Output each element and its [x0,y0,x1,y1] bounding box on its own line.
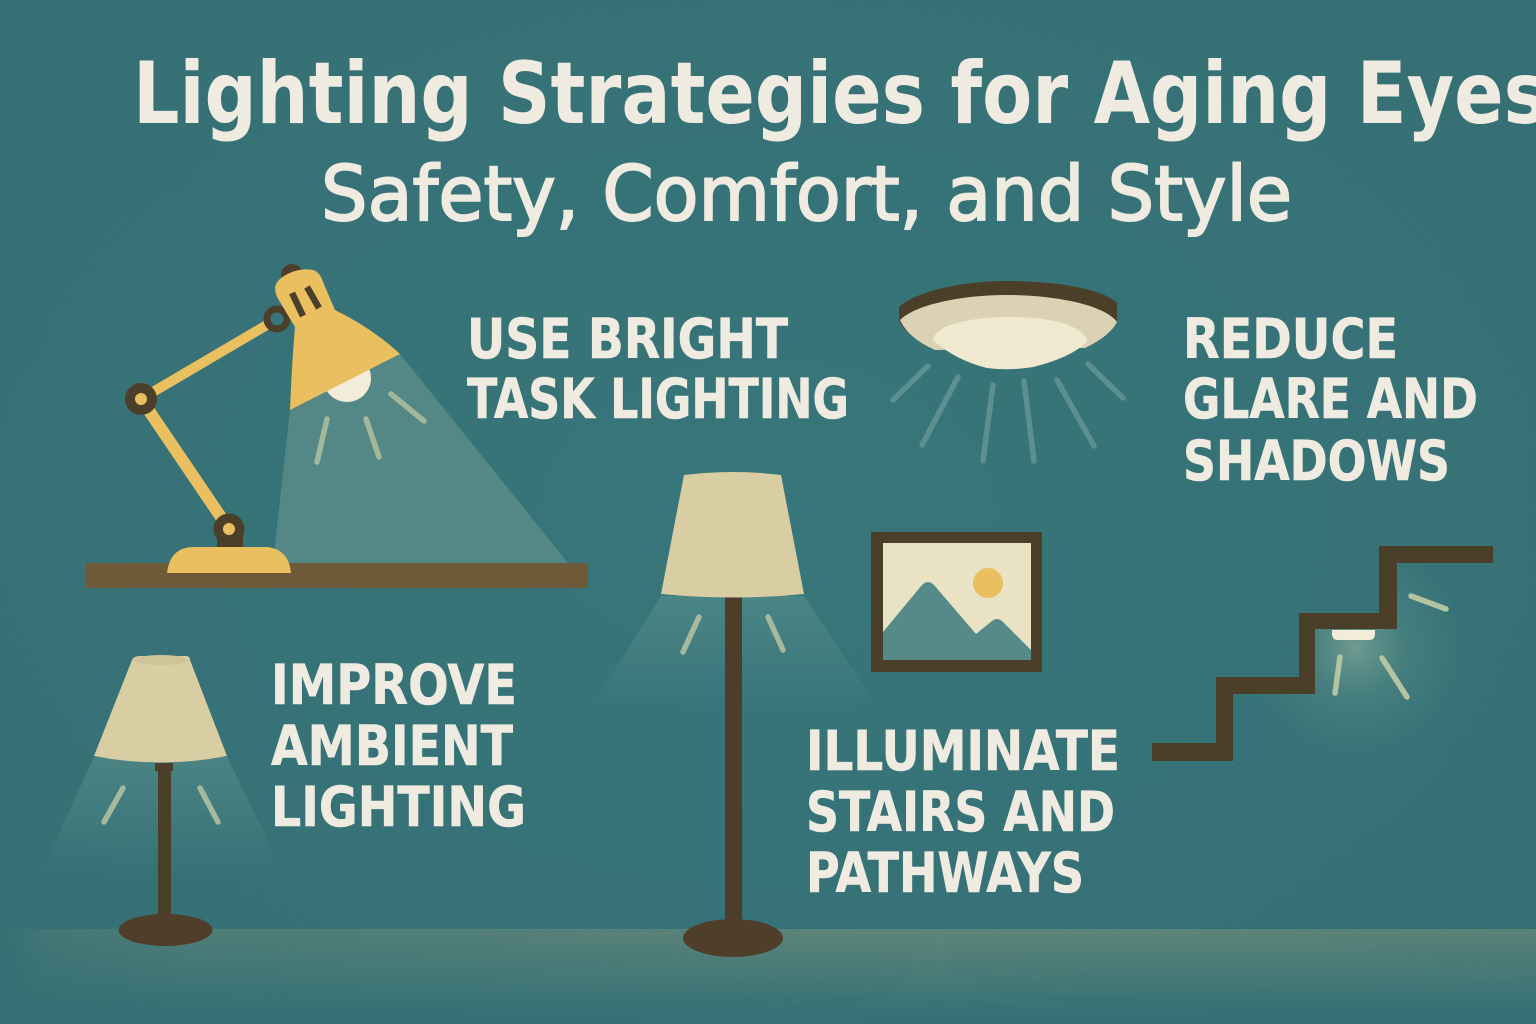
sun [973,568,1003,598]
stem [158,770,171,920]
shade [661,472,804,598]
icon: ceiling light [893,281,1123,461]
label: use bright task lighting: USE BRIGHT [467,307,788,371]
label: illuminate stairs and pathways: ILLUMINATE [806,719,1120,783]
icon: floor lamp [590,472,880,957]
step light [1332,630,1375,640]
label: use bright task lighting: TASK LIGHTING [467,367,849,431]
base [683,919,783,957]
label: reduce glare and shadows: GLARE AND [1183,367,1478,431]
icon: framed picture [871,532,1042,672]
label: use bright task lighting [467,307,849,431]
light rays [317,394,424,462]
sky [883,543,1031,660]
lamp cap [281,264,303,286]
light rays [893,364,1123,461]
lamp arms [141,319,277,529]
lower joint [214,514,244,544]
label: illuminate stairs and pathways: STAIRS AND [806,780,1115,844]
label: improve ambient lighting [271,653,526,839]
base [118,914,212,946]
lamp base socket [217,535,243,549]
light glow [40,757,285,875]
fixture body [900,295,1117,350]
staircase [1152,546,1493,761]
label: improve ambient lighting: AMBIENT [271,714,513,778]
light rays [683,617,783,652]
collar [155,763,173,771]
label: reduce glare and shadows: REDUCE [1183,307,1398,371]
upper joint [267,309,287,329]
shade vents [292,287,319,316]
lamp base [167,547,291,573]
light beam [273,354,568,563]
bulb [323,354,371,402]
label: improve ambient lighting: LIGHTING [271,775,526,839]
label: reduce glare and shadows: SHADOWS [1183,429,1450,493]
elbow joint [125,383,157,415]
light glow [1292,582,1435,726]
light rays [1335,596,1446,697]
label: reduce glare and shadows [1183,307,1478,493]
ceiling rim [899,281,1117,345]
dome diffuser [933,317,1087,369]
light glow [590,596,880,710]
icon: illuminated stairs [1152,538,1493,761]
icon: table lamp [40,655,285,946]
label: illuminate stairs and pathways [806,719,1120,905]
label: illuminate stairs and pathways: PATHWAYS [806,841,1084,905]
label: improve ambient lighting: IMPROVE [271,653,517,717]
shade [94,656,227,762]
frame [871,532,1042,672]
icon: desk lamp on desk [86,264,588,588]
subtitle: Safety, Comfort, and Style [321,149,1292,238]
shade opening [134,655,188,665]
desk [86,563,588,588]
light rays [104,788,218,822]
floor band [28,929,1536,996]
lamp shade [275,269,400,410]
mountains [883,582,1031,660]
pole [725,595,742,935]
